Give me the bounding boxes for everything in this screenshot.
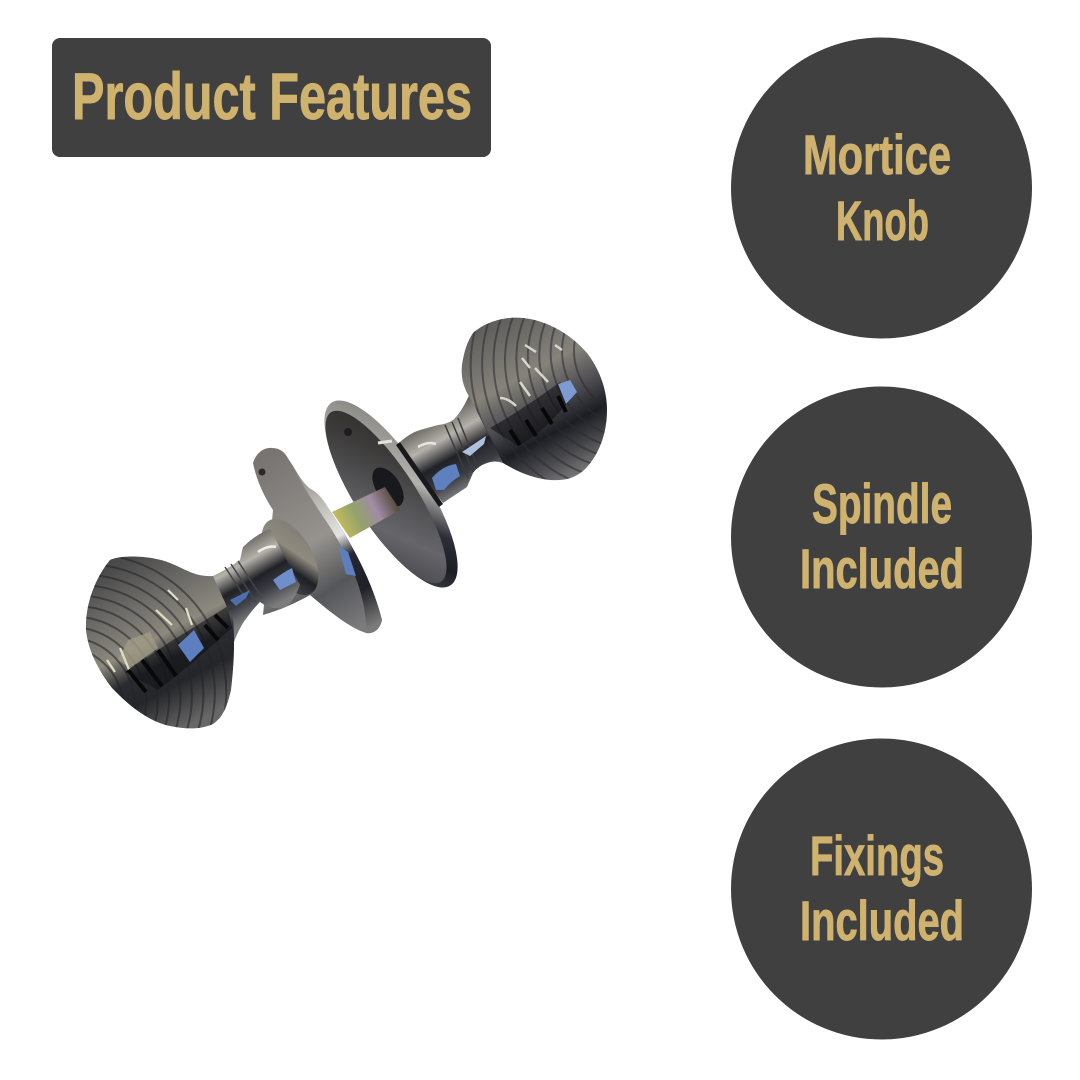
- title banner: [52, 38, 491, 157]
- left rose plate: [253, 448, 382, 633]
- right beehive knob: [462, 318, 607, 480]
- feature circle: Fixings Included: Fixings: [810, 824, 944, 887]
- right rose plate: [301, 383, 481, 605]
- feature circle: Spindle Included: Spindle: [812, 472, 952, 535]
- feature circle: Mortice Knob: Knob: [836, 189, 929, 252]
- feature circle: Spindle Included: [731, 386, 1032, 688]
- product image: mortice door knob set: [86, 318, 607, 728]
- feature circle: Mortice Knob: [731, 38, 1032, 338]
- spindle: [332, 487, 400, 538]
- feature circle: Mortice Knob: Mortice: [803, 123, 951, 186]
- right neck and collar: [396, 393, 503, 507]
- left beehive knob: [86, 556, 234, 728]
- title text: Product Features: [72, 59, 472, 133]
- feature circle: Fixings Included: [731, 738, 1032, 1040]
- left neck and collar: [205, 510, 330, 645]
- feature circle: Fixings Included: Included: [800, 889, 964, 952]
- feature circle: Spindle Included: Included: [800, 537, 964, 600]
